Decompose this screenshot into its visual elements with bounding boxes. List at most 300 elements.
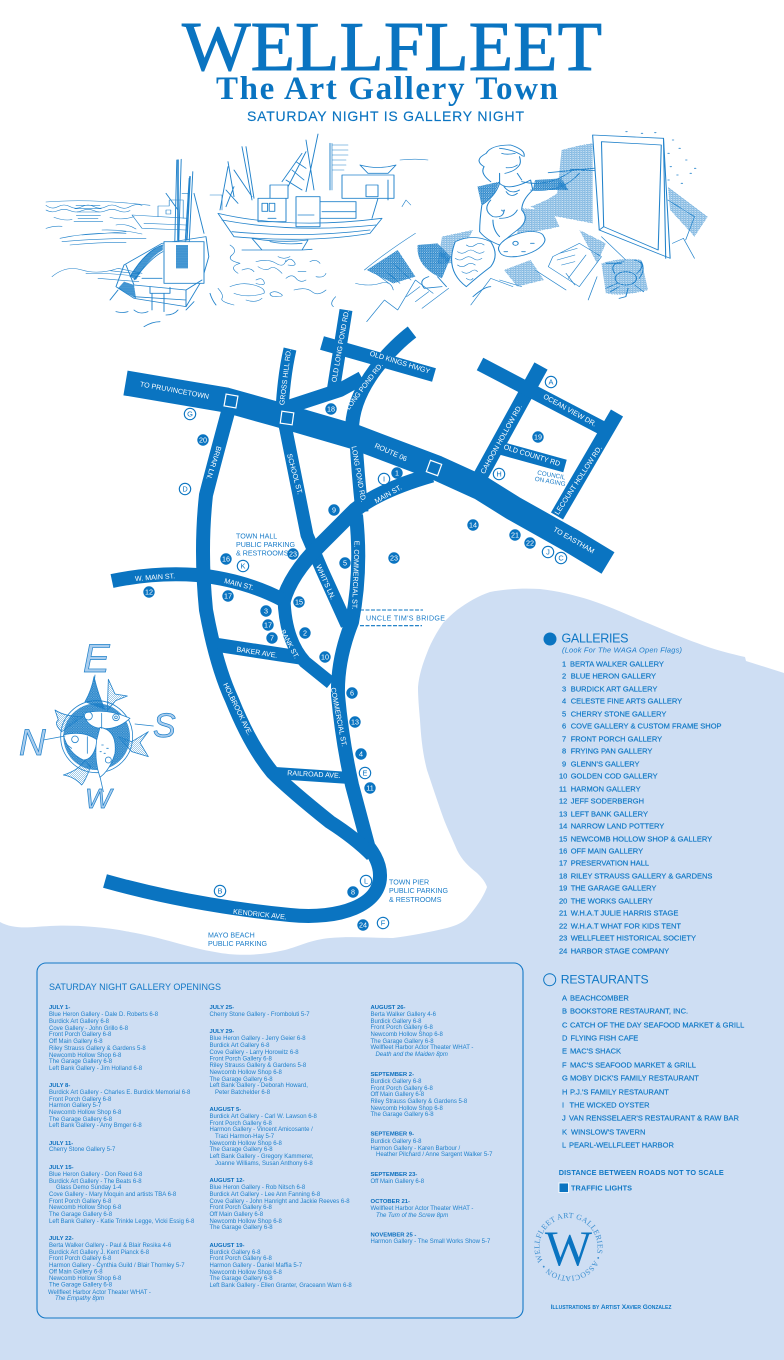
road labels: WHIT'S LN. [314,564,337,601]
road labels: MAIN ST. [223,577,254,592]
openings column 3: Wellfleet Harbor Actor Theater WHAT - [370,1206,473,1212]
openings column 2: Burdick Gallery 6-8 [210,1250,261,1256]
road: Lecount Hollow Rd [557,413,617,516]
label: Mayo Beach parking: MAYO BEACH [208,932,255,940]
openings column 1: Harmon Gallery 5-7 [49,1103,102,1109]
restaurant list: MAC'S SHACK [570,1047,621,1056]
openings column 2: Newcomb Hollow Shop 6-8 [210,1219,283,1225]
road: Cahoon Hollow Rd [480,366,541,477]
rocks [332,200,694,322]
openings column 2: Newcomb Hollow Shop 6-8 [210,1270,283,1276]
restaurant markers: G [187,410,193,419]
gallery list: HARMON GALLERY [571,785,641,794]
restaurant markers: H [496,470,502,479]
restaurant list: G [562,1074,568,1083]
gallery list: 8 [562,747,566,756]
harbor scene with boats [46,134,428,327]
gallery markers: 3 [264,606,268,616]
road: W. Main and Main St [112,574,283,600]
restaurant list: F [562,1061,567,1070]
openings column 1: Burdick Art Gallery J. Kent Pianck 6-8 [49,1250,150,1256]
canvas on easel [593,132,696,258]
openings column 2: Front Porch Gallery 6-8 [210,1256,273,1262]
openings column 3: Berta Walker Gallery 4-6 [370,1012,437,1018]
gallery list: FRONT PORCH GALLERY [571,735,662,744]
openings column 3: Riley Strauss Gallery & Gardens 5-8 [370,1099,468,1105]
gallery list: W.H.A.T JULIE HARRIS STAGE [571,909,678,918]
gallery list: 17 [559,859,567,868]
gallery markers: 12 [145,588,153,596]
openings column 2: Cove Gallery - Larry Horowitz 6-8 [210,1050,299,1056]
gallery list: 12 [559,797,567,806]
hatched disc [63,703,130,770]
restaurant list [562,994,744,1150]
map roads [105,310,617,916]
gallery list: 4 [562,697,566,706]
openings column 3: Burdick Gallery 6-8 [370,1139,422,1145]
openings column 1: Front Porch Gallery 6-8 [49,1097,112,1103]
gallery list: 2 [562,672,566,681]
gallery markers: 4 [359,750,363,758]
gallery markers: 5 [343,558,347,568]
compass letters: S [153,707,176,745]
road: Main St [283,475,432,602]
openings column 2: Newcomb Hollow Shop 6-8 [210,1070,283,1076]
openings column 2: Front Porch Gallery 6-8 [210,1121,273,1127]
restaurant list: FLYING FISH CAFE [570,1034,638,1043]
openings column 1: The Empathy 8pm [55,1296,104,1302]
gallery list: 9 [562,760,566,769]
mermaid painter scene [332,132,708,322]
openings column 2 [210,1005,352,1289]
openings column 1: Cove Gallery - John Grillo 6-8 [49,1026,129,1032]
illustration: harbor boats and mermaid painter [46,132,708,327]
gallery list: CELESTE FINE ARTS GALLERY [571,697,682,706]
openings column 2: AUGUST 5- [210,1107,241,1113]
openings column 2: Burdick Art Gallery - Lee Ann Fanning 6-8 [210,1192,321,1198]
gallery list: 6 [562,722,566,731]
road: Old Kings Hwy [322,343,434,375]
gallery list: PRESERVATION HALL [571,859,649,868]
restaurant list: MAC'S SEAFOOD MARKET & GRILL [570,1061,696,1070]
openings column 1: Left Bank Gallery - Jim Holland 6-8 [49,1066,143,1072]
crab [606,260,644,298]
openings column 1: The Garage Gallery 6-8 [49,1282,113,1288]
road labels: MAIN ST. [373,484,403,505]
road: Briar Ln and Holbrook Ave [203,412,372,855]
gallery list: CHERRY STONE GALLERY [571,710,666,719]
openings column 2: Off Main Gallery 6-8 [210,1212,264,1218]
fish tails [55,677,148,785]
openings column 1: Cove Gallery - Mary Moquin and artists TBA 6-8 [49,1192,177,1198]
logo: Wellfleet Art Galleries Association: WELLFLEET ART GALLERIES • ASSOCIATION • [534,1212,603,1282]
gallery list: 13 [559,810,567,819]
road labels [135,309,604,921]
main title: WELLFLEET [182,9,602,86]
gallery list: THE GARAGE GALLERY [571,884,656,893]
galleries heading icon [544,632,556,646]
gallery markers: 18 [327,404,335,414]
restaurant list: MOBY DICK'S FAMILY RESTAURANT [570,1074,699,1083]
restaurant list: J [562,1114,566,1123]
gallery markers: 11 [366,784,374,792]
road: Bank St [284,598,331,683]
gallery markers: 23 [390,554,398,562]
galleries heading: GALLERIES [562,632,628,646]
gallery list: 22 [559,922,567,931]
road: Ocean View Dr [480,364,606,430]
foreground boat [110,159,216,327]
road labels: BANK ST. [279,628,300,660]
openings column 1: Front Porch Gallery 6-8 [49,1256,112,1262]
road labels: KENDRICK AVE. [233,908,287,921]
openings column 1: JULY 11- [49,1141,73,1147]
openings column 1: Newcomb Hollow Shop 6-8 [49,1276,122,1282]
gallery list: THE WORKS GALLERY [571,897,653,906]
compass letters: N [19,722,46,763]
gallery list: W.H.A.T WHAT FOR KIDS TENT [571,922,681,931]
openings column 1: Off Main Gallery 6-8 [49,1270,103,1276]
openings column 2: AUGUST 12- [210,1178,245,1184]
restaurants heading icon [544,974,556,986]
hatched shadows [367,143,708,294]
gallery markers: 6 [350,688,354,698]
middle fishing boat [218,134,396,239]
road labels: LONG POND RD. [350,445,367,503]
gallery markers: 15 [295,598,303,606]
gallery markers: 20 [199,436,207,444]
gallery list: 7 [562,735,566,744]
openings column 1: JULY 22- [49,1236,74,1242]
title [182,9,602,124]
road: E. Commercial and Commercial St [338,515,368,845]
openings column 1: Blue Heron Gallery - Don Reed 6-8 [49,1172,143,1178]
gallery markers: 17 [224,592,232,600]
openings column 2: The Garage Gallery 6-8 [210,1077,273,1083]
gallery markers: 2 [303,628,307,638]
road labels: GROSS HILL RD. [278,349,293,406]
gallery list: NARROW LAND POTTERY [571,822,664,831]
gallery list: 18 [559,872,567,881]
openings column 3: Front Porch Gallery 6-8 [370,1086,434,1092]
restaurant list: E [562,1047,567,1056]
openings column 2: Blue Heron Gallery - Rob Nitsch 6-8 [210,1185,306,1191]
openings column 3: Newcomb Hollow Shop 6-8 [370,1106,444,1112]
gallery list: HARBOR STAGE COMPANY [571,947,669,956]
road labels: E. COMMERCIAL ST. [350,541,361,609]
road: Old Long Pond Rd [333,310,346,392]
gallery list: 14 [559,822,567,831]
gallery list: GOLDEN COD GALLERY [571,772,658,781]
openings column 2: The Garage Gallery 6-8 [210,1225,273,1231]
compass letters: E [83,637,111,681]
openings column 2: Peter Batchelder 6-8 [215,1090,271,1096]
place labels [208,469,567,948]
road labels: OLD LONG POND RD. [330,309,351,383]
openings column 2: Harmon Gallery - Daniel Maffia 5-7 [210,1263,303,1269]
gallery list: 1 [562,660,566,669]
openings column 3: The Garage Gallery 6-8 [370,1039,434,1045]
road: School St and Whit's Ln [285,425,347,625]
gallery list: RILEY STRAUSS GALLERY & GARDENS [571,872,712,881]
restaurant list: D [562,1034,568,1043]
traffic lights key: TRAFFIC LIGHTS [571,1184,632,1193]
road labels: SCHOOL ST. [285,453,304,495]
road labels: ROUTE 06 [373,442,408,463]
gallery list: NEWCOMB HOLLOW SHOP & GALLERY [571,835,712,844]
label: council on aging: ON AGING [534,476,566,488]
road labels: HOLBROOK AVE. [221,682,254,737]
logo: Wellfleet Art Galleries Association: W [545,1220,593,1276]
restaurant list: BOOKSTORE RESTAURANT, INC. [570,1007,688,1016]
panel: Saturday Night Gallery Openings [37,963,523,1318]
gallery markers: 19 [534,432,542,442]
openings column 1: Blue Heron Gallery - Dale D. Roberts 6-8 [49,1012,159,1018]
openings column 3: Harmon Gallery - Karen Barbour / [370,1146,461,1152]
openings column 2: Cherry Stone Gallery - Fromboluti 5-7 [210,1012,310,1018]
water background [0,589,784,1360]
gallery markers: 9 [332,506,336,514]
restaurant list: WINSLOW'S TAVERN [571,1128,645,1137]
openings column 3: Wellfleet Harbor Actor Theater WHAT - [370,1045,473,1051]
openings column 1: Glass Demo Sunday 1-4 [56,1185,122,1191]
openings column 2: Traci Harmon-Hay 5-7 [215,1134,275,1140]
openings column 2: JULY 29- [210,1029,234,1035]
restaurant list: PEARL-WELLFLEET HARBOR [569,1141,674,1150]
openings column 1: Berta Walker Gallery - Paul & Blair Resika 4-6 [49,1243,172,1249]
openings column 2: Newcomb Hollow Shop 6-8 [210,1141,283,1147]
openings column 1: Riley Strauss Gallery & Gardens 5-8 [49,1046,146,1052]
road labels: CAHOON HOLLOW RD. [479,403,524,475]
label: council on aging: COUNCIL [537,470,566,482]
label: town pier parking: PUBLIC PARKING [389,887,448,895]
openings column 2: Burdick Art Gallery - Carl W. Lawson 6-8 [210,1114,318,1120]
openings column 1: Burdick Art Gallery 6-8 [49,1019,110,1025]
galleries note: (Look For The WAGA Open Flags) [562,646,683,654]
label: town pier parking: & RESTROOMS [389,896,442,904]
openings column 1: Front Porch Gallery 6-8 [49,1199,112,1205]
gallery list: BLUE HERON GALLERY [571,672,656,681]
restaurant markers [179,376,567,929]
restaurant list: CATCH OF THE DAY SEAFOOD MARKET & GRILL [570,1021,744,1030]
openings column 2: Left Bank Gallery - Gregory Kammerer, [210,1154,314,1160]
restaurant markers: D [182,485,188,494]
openings column 2: Blue Heron Gallery - Jerry Geier 6-8 [210,1036,306,1042]
gallery list: 15 [559,835,567,844]
road labels: COMMERCIAL ST. [329,687,348,747]
openings column 3: Burdick Gallery 6-8 [370,1019,422,1025]
rowboat [242,238,312,250]
gallery markers: 22 [526,538,534,548]
road labels: OLD COUNTY RD [503,443,561,468]
road: Gross Hill Rd [282,349,290,410]
legend: restaurants [544,973,744,1193]
gallery list: 21 [559,909,567,918]
compass rose with fish [19,637,176,814]
openings column 1: JULY 8- [49,1083,70,1089]
background boats [132,143,428,230]
restaurant markers: E [363,769,368,778]
gallery list: 11 [559,785,567,794]
openings column 1: Burdick Art Gallery - Charles E. Burdick Memorial 6-8 [49,1090,191,1096]
openings column 1: Left Bank Gallery - Katie Trinkle Legge, Vicki Essig 6-8 [49,1219,195,1225]
label: Uncle Tim's Bridge with dashes: UNCLE TIM'S BRIDGE [366,614,445,622]
mermaid figure [422,145,610,297]
restaurant markers: B [218,887,223,896]
compass points [43,675,153,792]
restaurant list: C [562,1021,568,1030]
restaurant markers: L [364,877,368,886]
openings column 1: Harmon Gallery - Cynthia Guild / Blair Thornley 5-7 [49,1263,185,1269]
gallery markers: 10 [321,652,329,662]
gallery list: JEFF SODERBERGH [571,797,644,806]
road: Old County Rd [500,448,565,466]
scale note: DISTANCE BETWEEN ROADS NOT TO SCALE [559,1168,724,1177]
openings column 3: NOVEMBER 25 - [370,1232,416,1238]
gallery list: 24 [559,947,567,956]
restaurant markers: I [383,475,385,484]
gallery markers [143,403,544,931]
gallery markers: 23 [289,550,297,558]
traffic light squares [224,394,442,476]
restaurant list: VAN RENSSELAER'S RESTAURANT & RAW BAR [569,1114,740,1123]
openings column 1: Front Porch Gallery 6-8 [49,1032,112,1038]
gallery list: 20 [559,897,567,906]
road labels: OCEAN VIEW DR. [542,393,598,428]
openings column 1: Wellfleet Harbor Actor Theater WHAT - [48,1290,151,1296]
gallery markers: 13 [351,718,359,726]
restaurant list: THE WICKED OYSTER [570,1101,650,1110]
illustration credit: Illustrations by Artist Xavier Gonzalez [551,1304,671,1311]
gallery markers: 14 [469,520,477,530]
openings column 2: Front Porch Gallery 6-8 [210,1056,273,1062]
restaurant markers: C [558,554,564,563]
openings column 3: Heather Pilchard / Anne Sargent Walker 5-7 [376,1152,493,1158]
road: Railroad Ave [275,773,350,778]
openings column 1: The Garage Gallery 6-8 [49,1117,113,1123]
openings column 2: Harmon Gallery - Vincent Amicosante / [210,1127,313,1133]
openings column 3: Burdick Gallery 6-8 [370,1079,422,1085]
road labels: TO PRUVINCETOWN [139,380,209,401]
road labels: LECOUNT HOLLOW RD. [553,444,604,516]
label: Uncle Tim's Bridge with dashes [360,610,445,626]
openings column 1: Newcomb Hollow Shop 6-8 [49,1053,122,1059]
panel heading: SATURDAY NIGHT GALLERY OPENINGS [49,982,221,992]
openings column 3: Harmon Gallery - The Small Works Show 5-7 [370,1239,491,1245]
road: connector to Gross Hill [285,378,362,408]
road labels: LONG POND RD. [344,361,385,411]
gallery list: WELLFLEET HISTORICAL SOCIETY [571,934,696,943]
restaurant list: B [562,1007,567,1016]
openings column 3: Front Porch Gallery 6-8 [370,1025,434,1031]
gallery list: LEFT BANK GALLERY [571,810,648,819]
road: Route 6 [126,383,608,563]
openings column 2: The Garage Gallery 6-8 [210,1276,273,1282]
label: Mayo Beach parking: PUBLIC PARKING [208,940,267,948]
restaurant list: BEACHCOMBER [570,994,629,1003]
gallery list: 3 [562,685,566,694]
gallery list: 16 [559,847,567,856]
legend: galleries [544,632,722,956]
openings column 1: The Garage Gallery 6-8 [49,1212,113,1218]
gallery list: FRYING PAN GALLERY [571,747,652,756]
openings column 3: AUGUST 26- [370,1005,406,1011]
road labels: RAILROAD AVE. [287,769,341,780]
restaurant markers: J [546,548,550,557]
road: Baker Ave [218,645,303,658]
label: town hall parking: PUBLIC PARKING [236,541,295,549]
label: town pier parking: TOWN PIER [389,878,429,886]
water squiggles [218,245,326,305]
openings column 3: Death and the Maiden 8pm [376,1052,448,1058]
tagline: SATURDAY NIGHT IS GALLERY NIGHT [247,108,524,124]
openings column 3: Off Main Gallery 6-8 [370,1179,425,1185]
gallery list: 23 [559,934,567,943]
openings column 3: SEPTEMBER 23- [370,1172,417,1178]
restaurant markers: A [549,378,554,387]
gallery list: COVE GALLERY & CUSTOM FRAME SHOP [571,722,722,731]
compass ring [61,701,133,773]
gallery list: BERTA WALKER GALLERY [570,660,664,669]
openings column 3: Off Main Gallery 6-8 [370,1092,425,1098]
restaurants heading: RESTAURANTS [561,973,649,987]
openings column 2: Burdick Art Gallery 6-8 [210,1043,270,1049]
gallery list: 10 [559,772,567,781]
gallery list: BURDICK ART GALLERY [571,685,657,694]
openings column 2: Cove Gallery - John Hanright and Jackie Reeves 6-8 [210,1199,350,1205]
openings column 2: Riley Strauss Gallery & Gardens 5-8 [210,1063,307,1069]
openings column 1: Burdick Art Gallery - The Beats 6-8 [49,1179,142,1185]
gallery list: OFF MAIN GALLERY [571,847,643,856]
gallery list: 19 [559,884,567,893]
openings column 2: Joanne Williams, Susan Anthony 6-8 [215,1161,313,1167]
road: Long Pond Rd lower [356,440,362,512]
openings column 2: Left Bank Gallery - Deborah Howard, [210,1083,308,1089]
openings column 3: SEPTEMBER 9- [370,1132,414,1138]
gallery markers: 7 [270,634,274,642]
openings column 3: The Turn of the Screw 8pm [376,1213,448,1219]
openings column 1: Left Bank Gallery - Amy Bmger 6-8 [49,1123,142,1129]
sea and waves [46,201,150,282]
gallery list: GLENN'S GALLERY [571,760,640,769]
road labels: OLD KINGS HWGY [369,350,431,376]
fish bodies [63,711,130,777]
road labels: BAKER AVE. [236,645,278,660]
openings column 2: Left Bank Gallery - Ellen Granter, Graceann Warn 6-8 [210,1283,352,1289]
restaurant list: A [562,994,567,1003]
compass letters: W [85,783,114,814]
openings column 2: Front Porch Gallery 6-8 [210,1205,273,1211]
openings column 1: Newcomb Hollow Shop 6-8 [49,1205,122,1211]
openings column 2: JULY 25- [210,1005,234,1011]
road: Kendrick Ave [105,846,380,916]
road labels: W. MAIN ST. [135,572,175,583]
openings column 3 [370,1005,493,1245]
restaurant markers: K [241,562,246,571]
compass letters [19,637,176,814]
restaurant list: L [562,1141,566,1150]
gallery markers: 8 [351,888,355,896]
road: Long Pond Rd upper [352,332,412,430]
label: town hall parking: & RESTROOMS [236,550,289,558]
gallery markers: 1 [395,468,399,478]
restaurant list: P.J.'S FAMILY RESTAURANT [570,1088,669,1097]
subtitle: The Art Gallery Town [216,71,558,107]
openings column 1: JULY 1- [49,1005,70,1011]
restaurant list: K [562,1128,567,1137]
gallery markers: 24 [359,920,367,930]
road labels: BRIAR LN. [204,445,223,481]
